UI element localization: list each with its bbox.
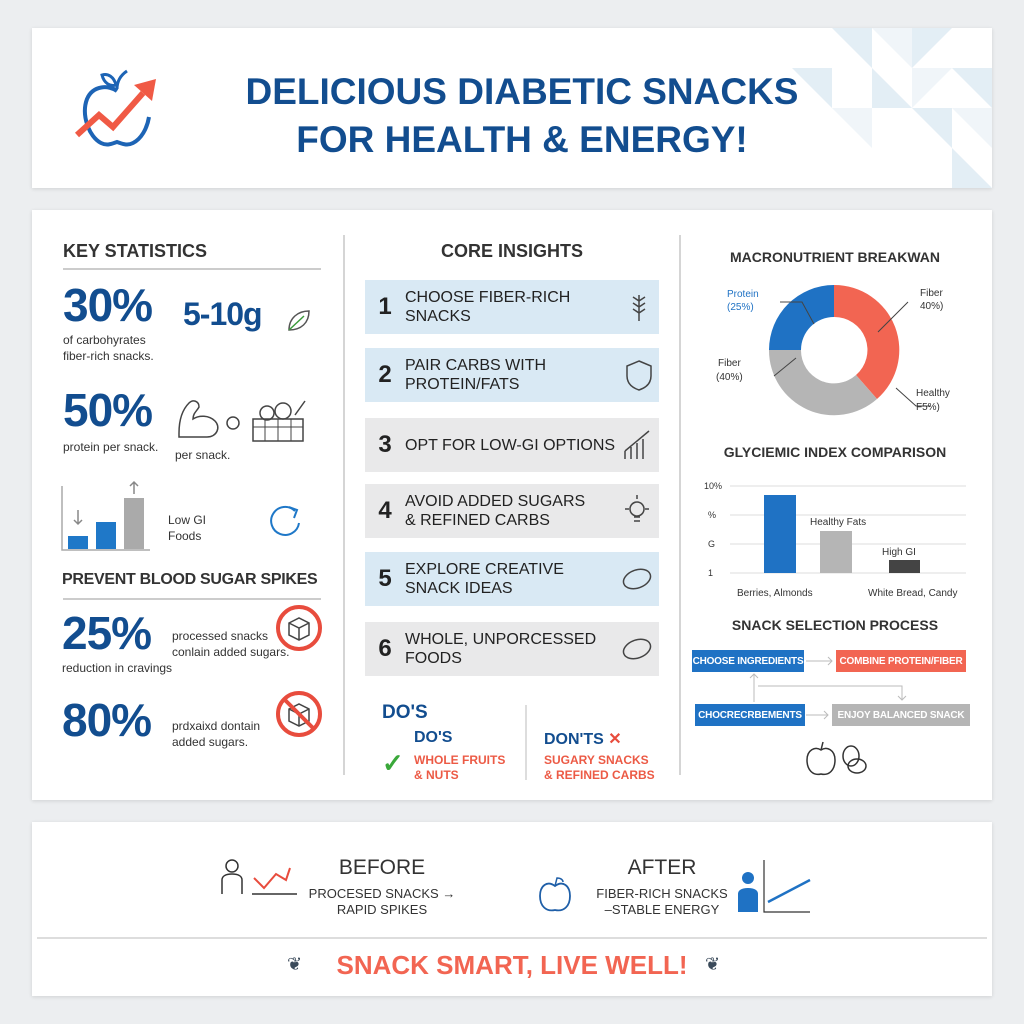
flowchart: ENJOY BALANCED SNACK <box>838 710 964 720</box>
card 5: 5 <box>378 565 392 592</box>
icon: apple and nuts <box>806 742 867 776</box>
do's and don'ts <box>382 702 655 782</box>
icon: check: ✓ <box>382 748 404 778</box>
title <box>246 71 798 160</box>
card 1: CHOOSE FIBER-RICH <box>405 289 570 306</box>
panel: key statistics: Foods <box>168 529 201 543</box>
flowchart: COMBINE PROTEIN/FIBER <box>839 656 963 666</box>
panel: key statistics: prdxaixd dontain <box>172 719 260 733</box>
stat 25%: reduction in cravings <box>62 661 172 675</box>
stat 25% <box>62 607 172 675</box>
panel: key statistics: conlain added sugars. <box>172 645 289 659</box>
stat 80%: 80% <box>62 694 151 746</box>
stat 50%: protein per snack. <box>63 440 158 454</box>
chart: mini bars <box>61 481 150 551</box>
card 6: WHOLE, UNPORCESSED <box>405 631 596 648</box>
panel: before/after: ❦ <box>705 954 720 974</box>
heading: key statistics: KEY STATISTICS <box>63 241 207 261</box>
icon: apple <box>539 877 571 912</box>
chart: donut: (40%) <box>716 372 743 383</box>
stat 30%: of carbohyrates <box>63 333 146 347</box>
panel: key statistics: added sugars. <box>172 735 248 749</box>
stat 50% <box>63 384 158 454</box>
icons: leaves: ❦ <box>287 954 302 974</box>
panel: key statistics <box>61 241 322 749</box>
panel: key statistics: Low GI <box>168 513 206 527</box>
chart: donut: 40%) <box>920 301 943 312</box>
card 3: OPT FOR LOW-GI OPTIONS <box>405 436 615 454</box>
do's and don'ts: & NUTS <box>414 768 459 782</box>
icon: no sugar cube 2 <box>276 691 322 737</box>
chart: GI bars: High GI <box>882 547 916 558</box>
chart: donut: Fiber <box>718 358 741 369</box>
chart: GI bars: G <box>708 539 715 549</box>
stat 25%: 25% <box>62 607 151 659</box>
chart: donut: Healthy <box>916 388 950 399</box>
card 1: 1 <box>378 293 392 320</box>
card 4 <box>365 484 659 538</box>
card 2: 2 <box>378 361 392 388</box>
before text: RAPID SPIKES <box>337 902 427 917</box>
card 4: AVOID ADDED SUGARS <box>405 493 585 510</box>
card 6: FOODS <box>405 650 462 667</box>
stat 30% <box>63 279 154 363</box>
card 4: 4 <box>378 497 392 524</box>
card 2 <box>365 348 659 402</box>
chart: GI bars: 1 <box>708 568 713 578</box>
stat 50%: 50% <box>63 384 152 436</box>
do's and don'ts: DO'S <box>414 729 452 746</box>
do's and don'ts: DON'TS ✕ <box>544 731 622 748</box>
flowchart <box>692 650 970 726</box>
chart: GI bars: Healthy Fats <box>810 517 866 528</box>
flowchart: CHOCRECRBEMENTS <box>698 710 802 720</box>
icon: leaf <box>288 310 310 331</box>
do's and don'ts: SUGARY SNACKS <box>544 753 649 767</box>
heading: macronutrient: MACRONUTRIENT BREAKWAN <box>730 249 940 265</box>
icon: refresh <box>270 506 300 536</box>
chart: GI bars <box>704 481 966 599</box>
stat 30%: 30% <box>63 279 152 331</box>
do's and don'ts: DO'S <box>382 702 428 723</box>
card 2: PAIR CARBS WITH <box>405 357 546 374</box>
card 6: 6 <box>378 635 392 662</box>
heading: snack selection: SNACK SELECTION PROCESS <box>732 617 938 633</box>
chart: GI bars: 10% <box>704 481 722 491</box>
after text: FIBER-RICH SNACKS <box>596 886 728 901</box>
do's and don'ts: WHOLE FRUITS <box>414 753 505 767</box>
before text <box>309 856 455 917</box>
title: DELICIOUS DIABETIC SNACKS <box>246 71 798 112</box>
card 5: SNACK IDEAS <box>405 580 513 597</box>
card 3 <box>365 418 659 472</box>
heading: glycemic: GLYCIEMIC INDEX COMPARISON <box>724 444 946 460</box>
icon: no sugar cube 1 <box>276 605 322 651</box>
chart: donut <box>716 285 950 416</box>
flowchart: CHOOSE INGREDIENTS <box>693 656 803 666</box>
do's and don'ts: & REFINED CARBS <box>544 768 655 782</box>
decorative triangles <box>792 28 992 188</box>
chart: GI bars: % <box>708 510 716 520</box>
chart: donut: Fiber <box>920 288 943 299</box>
chart: donut: F5%) <box>916 402 940 413</box>
icon: person with spike <box>221 859 297 895</box>
chart: GI bars: Berries, Almonds <box>737 588 813 599</box>
card 5: EXPLORE CREATIVE <box>405 561 564 578</box>
stat 5-10g: 5-10g <box>183 296 262 332</box>
heading: core insights: CORE INSIGHTS <box>441 241 583 261</box>
card 3: 3 <box>378 431 392 458</box>
icon: muscle arm and basket <box>178 400 306 442</box>
panel: before/after <box>32 822 992 996</box>
panel: header <box>32 28 992 188</box>
after text <box>596 856 728 917</box>
card 5 <box>365 552 659 606</box>
chart: donut: Protein <box>727 289 759 300</box>
stat 30%: fiber-rich snacks. <box>63 349 154 363</box>
title: FOR HEALTH & ENERGY! <box>296 119 748 160</box>
after text: AFTER <box>628 856 696 879</box>
before text: PROCESED SNACKS → <box>309 886 455 901</box>
chart: donut: (25%) <box>727 302 754 313</box>
card 2: PROTEIN/FATS <box>405 376 519 393</box>
card 4: & REFINED CARBS <box>405 512 550 529</box>
heading: prevent spikes: PREVENT BLOOD SUGAR SPIKES <box>62 571 317 588</box>
icon: apple with arrow <box>75 70 156 146</box>
card 1: SNACKS <box>405 308 471 325</box>
panel: key statistics: processed snacks <box>172 629 268 643</box>
panel: main <box>32 210 992 800</box>
panel: key statistics: per snack. <box>175 448 230 462</box>
tagline: SNACK SMART, LIVE WELL! <box>336 950 688 980</box>
chart: GI bars: White Bread, Candy <box>868 588 958 599</box>
icon: person with stable line <box>738 860 810 913</box>
card 6 <box>365 622 659 676</box>
after text: –STABLE ENERGY <box>605 902 719 917</box>
card 1 <box>365 280 659 334</box>
before text: BEFORE <box>339 856 425 879</box>
